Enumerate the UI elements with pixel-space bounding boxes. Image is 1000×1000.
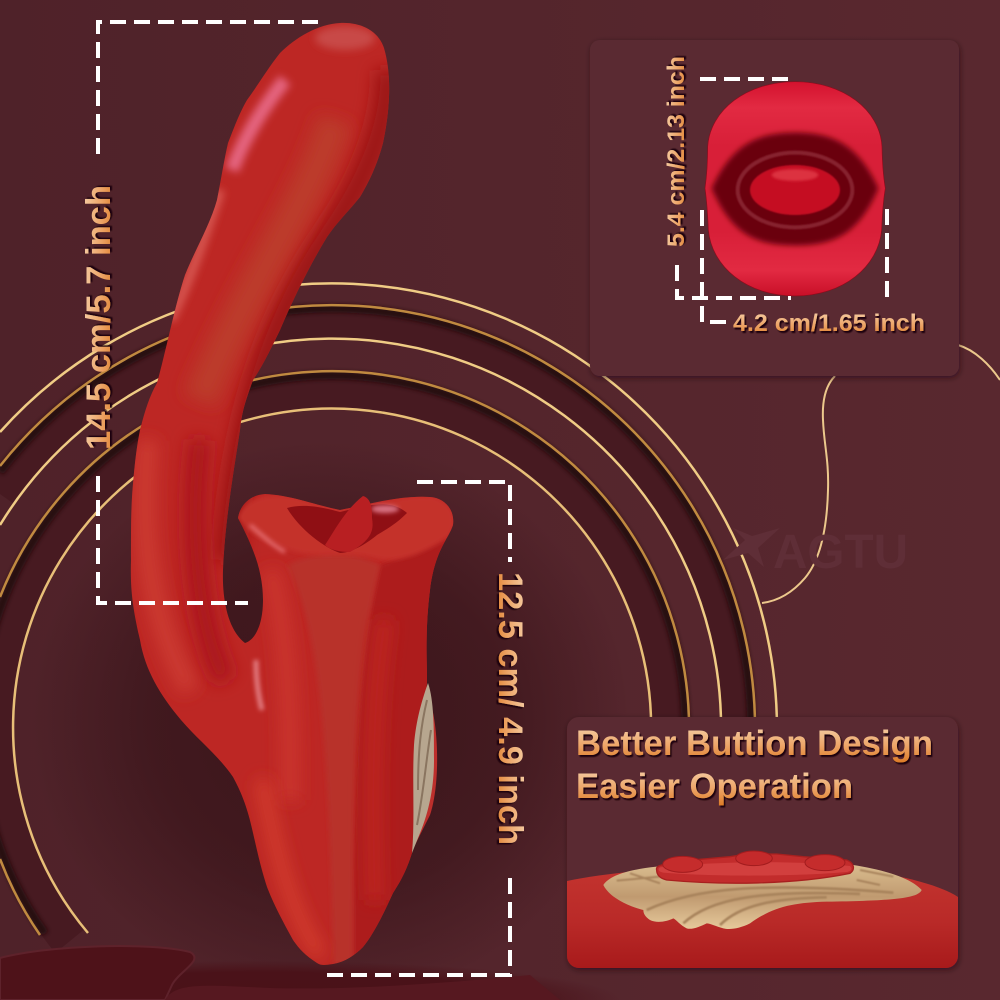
centre arm glow <box>200 120 335 400</box>
panel: button design <box>567 717 958 968</box>
flower lip <box>238 495 454 560</box>
lower arm glow <box>145 440 190 690</box>
centre panel of flower body <box>287 554 380 964</box>
heading <box>576 724 933 806</box>
gold side button <box>412 683 437 853</box>
top tip glow <box>315 26 375 50</box>
gold shell and buttons <box>603 851 922 929</box>
width and height dimension lines <box>677 79 887 322</box>
right panel of flower body <box>354 540 446 954</box>
head top view <box>705 82 885 296</box>
product silhouette <box>120 15 470 975</box>
dimension label: arm height: 14.5 cm/5.7 inch <box>80 185 118 450</box>
background shadow around product <box>30 440 630 1000</box>
gold concentric arcs <box>0 283 777 941</box>
dimension lines: head height <box>327 482 510 975</box>
floor and pedestal <box>0 932 620 1000</box>
red product surface <box>567 865 958 968</box>
main body <box>120 15 470 975</box>
panel: head size <box>590 40 959 376</box>
watermark: AGTU <box>773 526 908 579</box>
dimension label: head height: 12.5 cm/ 4.9 inch <box>491 572 529 845</box>
flower opening <box>287 504 407 553</box>
gold curve right <box>762 345 1000 603</box>
left flower glow <box>270 570 290 800</box>
pink highlight <box>232 80 285 170</box>
right edge shade <box>228 70 388 560</box>
head width label: 4.2 cm/1.65 inch <box>733 310 925 337</box>
tongue <box>325 496 373 552</box>
heading: Easier Operation <box>576 767 853 806</box>
inner highlight <box>371 505 399 513</box>
heading: Better Buttion Design <box>576 724 933 763</box>
head height label: 5.4 cm/2.13 inch <box>663 56 690 247</box>
dimension lines: arm height <box>98 22 318 603</box>
